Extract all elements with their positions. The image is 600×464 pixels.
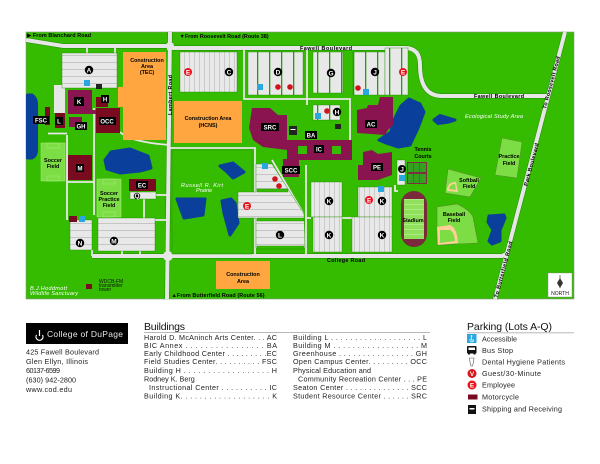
campus map bbox=[26, 32, 574, 299]
building labels: OCC bbox=[100, 120, 114, 126]
buildings legend: Rodney K. Berg bbox=[144, 374, 195, 384]
buildings legend: Early Childhood Center . . . . . . . . .EC bbox=[144, 349, 277, 358]
building labels: K bbox=[77, 100, 82, 106]
lot markers: M bbox=[111, 238, 117, 246]
map labels: Stadium bbox=[402, 218, 424, 224]
map labels: ▶ From Blanchard Road bbox=[26, 33, 91, 39]
buildings legend: Building L . . . . . . . . . . . . . . . . . . . L bbox=[293, 333, 427, 342]
building labels: IC bbox=[316, 148, 323, 154]
map labels: Lambert Road bbox=[168, 75, 174, 115]
map labels: Russell R. Kirt bbox=[181, 183, 223, 189]
map labels: Soccer bbox=[100, 191, 119, 197]
parking legend bbox=[467, 321, 574, 414]
dental item: Dental Hygiene Patients bbox=[482, 358, 565, 366]
building labels: GH bbox=[76, 124, 86, 130]
lot markers: Q bbox=[134, 193, 140, 200]
stadium bbox=[401, 191, 427, 247]
north arrow: NORTH bbox=[551, 291, 569, 297]
building labels: L bbox=[57, 120, 61, 126]
map labels bbox=[26, 33, 562, 299]
map labels: Practice bbox=[499, 154, 519, 160]
map labels: Courts bbox=[414, 154, 432, 160]
motorcycle item: Motorcycle bbox=[482, 392, 519, 402]
lot markers: L bbox=[278, 232, 282, 240]
buildings legend: Building M . . . . . . . . . . . . . . . . . . M bbox=[293, 341, 427, 350]
accessible item: Accessible bbox=[482, 334, 517, 344]
building labels: SRC bbox=[264, 126, 277, 132]
guest item: V bbox=[470, 371, 475, 378]
map labels: (HCNS) bbox=[199, 123, 218, 129]
lot markers: K bbox=[327, 232, 332, 240]
building labels: H bbox=[103, 98, 107, 104]
accessible markers bbox=[79, 80, 405, 222]
map labels: To Roosevelt Road bbox=[542, 56, 562, 110]
buildings legend: Community Recreation Center . . . PE bbox=[298, 374, 427, 384]
map labels: WDCB-FM bbox=[99, 279, 123, 285]
buildings legend: Field Studies Center. . . . . . . . . . FSC bbox=[144, 357, 277, 366]
map labels: Construction Area bbox=[185, 116, 232, 122]
building labels: FSC bbox=[35, 118, 48, 124]
lot markers: A bbox=[87, 68, 92, 74]
map labels: Prairie bbox=[196, 188, 212, 194]
logo: College of DuPage bbox=[47, 329, 123, 339]
buildings legend: Building K. . . . . . . . . . . . . . . . . . . K bbox=[144, 392, 277, 400]
guest item: Guest/30-Minute bbox=[482, 369, 541, 378]
buildings legend: Student Resource Center . . . . . . SRC bbox=[293, 392, 427, 400]
employee and guest markers: E bbox=[245, 204, 250, 210]
map labels: ▲From Butterfield Road (Route 56) bbox=[172, 293, 265, 299]
map labels: Construction bbox=[226, 272, 260, 278]
building labels: M bbox=[78, 166, 82, 172]
map labels: Softball bbox=[459, 178, 479, 184]
lot markers: J bbox=[400, 166, 404, 174]
map labels: Ecological Study Area bbox=[465, 114, 523, 120]
buildings legend bbox=[144, 321, 430, 400]
baseball field bbox=[437, 204, 478, 245]
address bbox=[25, 348, 99, 394]
lot markers: K bbox=[327, 198, 332, 206]
map labels: To Butterfield Road bbox=[494, 241, 514, 299]
parking lots bbox=[62, 48, 408, 252]
map labels: Wildlife Sanctuary bbox=[30, 291, 79, 297]
map labels: Fawell Boulevard bbox=[300, 46, 352, 52]
buildings legend: Buildings bbox=[144, 321, 185, 333]
buildings legend: BIC Annex . . . . . . . . . . . . . . . . BA bbox=[144, 341, 277, 350]
map labels: Field bbox=[103, 203, 115, 209]
building labels: BA bbox=[307, 134, 316, 140]
map labels: Tennis bbox=[415, 147, 431, 153]
map labels: ▼From Roosevelt Road (Route 38) bbox=[180, 34, 269, 40]
employee item bbox=[468, 380, 515, 390]
employee item: E bbox=[470, 382, 475, 390]
lakes bbox=[28, 95, 505, 244]
lot markers: G bbox=[328, 70, 334, 78]
map labels: Area bbox=[141, 64, 154, 70]
map labels: Field bbox=[47, 164, 59, 170]
address: 425 Fawell Boulevard bbox=[26, 348, 99, 356]
address: 60137-6599 bbox=[26, 366, 60, 375]
employee and guest markers: E bbox=[367, 198, 372, 204]
map labels: Field bbox=[503, 161, 515, 167]
map labels: B.J.Hoddmott bbox=[30, 286, 67, 292]
map labels: Area bbox=[237, 279, 250, 285]
parking legend: Parking (Lots A-Q) bbox=[467, 321, 552, 333]
lot markers: H bbox=[335, 110, 340, 116]
address: www.cod.edu bbox=[25, 385, 72, 394]
north arrow bbox=[548, 273, 572, 297]
buildings bbox=[45, 90, 393, 222]
bus and shipping icons bbox=[96, 84, 341, 135]
employee and guest markers: E bbox=[401, 70, 406, 76]
bus stop item: Bus Stop bbox=[482, 346, 513, 355]
map labels: Baseball bbox=[443, 212, 466, 218]
map labels: Field bbox=[463, 184, 475, 190]
map labels: Field bbox=[448, 218, 460, 224]
map labels: (TEC) bbox=[140, 70, 154, 76]
map labels: Fawell Boulevard bbox=[474, 94, 524, 100]
map labels: transmitter bbox=[99, 283, 123, 289]
buildings legend: Harold D. McAninch Arts Center. . . AC bbox=[144, 333, 277, 342]
construction areas bbox=[118, 52, 270, 289]
lot markers: K bbox=[380, 232, 385, 240]
buildings legend: Physical Education and bbox=[293, 366, 371, 375]
building labels: PE bbox=[373, 166, 381, 172]
employee and guest markers bbox=[184, 68, 407, 210]
tennis courts bbox=[407, 162, 427, 184]
roads bbox=[26, 32, 565, 299]
lot markers: J bbox=[373, 70, 377, 76]
buildings legend: Seaton Center . . . . . . . . . . . . . . SCC bbox=[293, 383, 427, 392]
WDCB tower marker bbox=[86, 284, 92, 289]
map labels: Construction bbox=[130, 58, 164, 64]
employee item: Employee bbox=[482, 380, 515, 390]
buildings legend: Building H . . . . . . . . . . . . . . . . . . H bbox=[144, 366, 277, 375]
address: (630) 942-2800 bbox=[26, 376, 76, 384]
softball field bbox=[445, 169, 481, 197]
address: Glen Ellyn, Illinois bbox=[26, 357, 88, 366]
lot markers: C bbox=[227, 70, 232, 76]
buildings legend: Open Campus Center. . . . . . . . . OCC bbox=[293, 357, 427, 366]
lot markers: K bbox=[380, 198, 385, 206]
map labels: Practice bbox=[99, 197, 119, 203]
shipping item: Shipping and Receiving bbox=[482, 404, 562, 414]
lot markers bbox=[76, 66, 406, 248]
sports fields bbox=[41, 138, 522, 247]
practice field bbox=[495, 138, 522, 178]
building labels: SCC bbox=[285, 168, 298, 174]
building labels: EC bbox=[138, 184, 147, 190]
buildings legend: Instructional Center . . . . . . . . . . IC bbox=[149, 383, 277, 392]
logo bbox=[26, 323, 128, 344]
lot markers: D bbox=[276, 70, 281, 76]
map background bbox=[26, 32, 574, 299]
map labels: College Road bbox=[327, 258, 365, 264]
map labels: Park Boulevard bbox=[523, 143, 541, 187]
building labels: AC bbox=[367, 122, 376, 128]
map labels: tower bbox=[99, 287, 112, 293]
soccer fields bbox=[41, 143, 121, 217]
map labels: Soccer bbox=[44, 158, 63, 164]
building labels bbox=[33, 95, 383, 190]
lot markers: N bbox=[78, 240, 83, 248]
buildings legend: Greenhouse . . . . . . . . . . . . . . . . GH bbox=[293, 349, 427, 358]
employee and guest markers: E bbox=[186, 70, 191, 76]
